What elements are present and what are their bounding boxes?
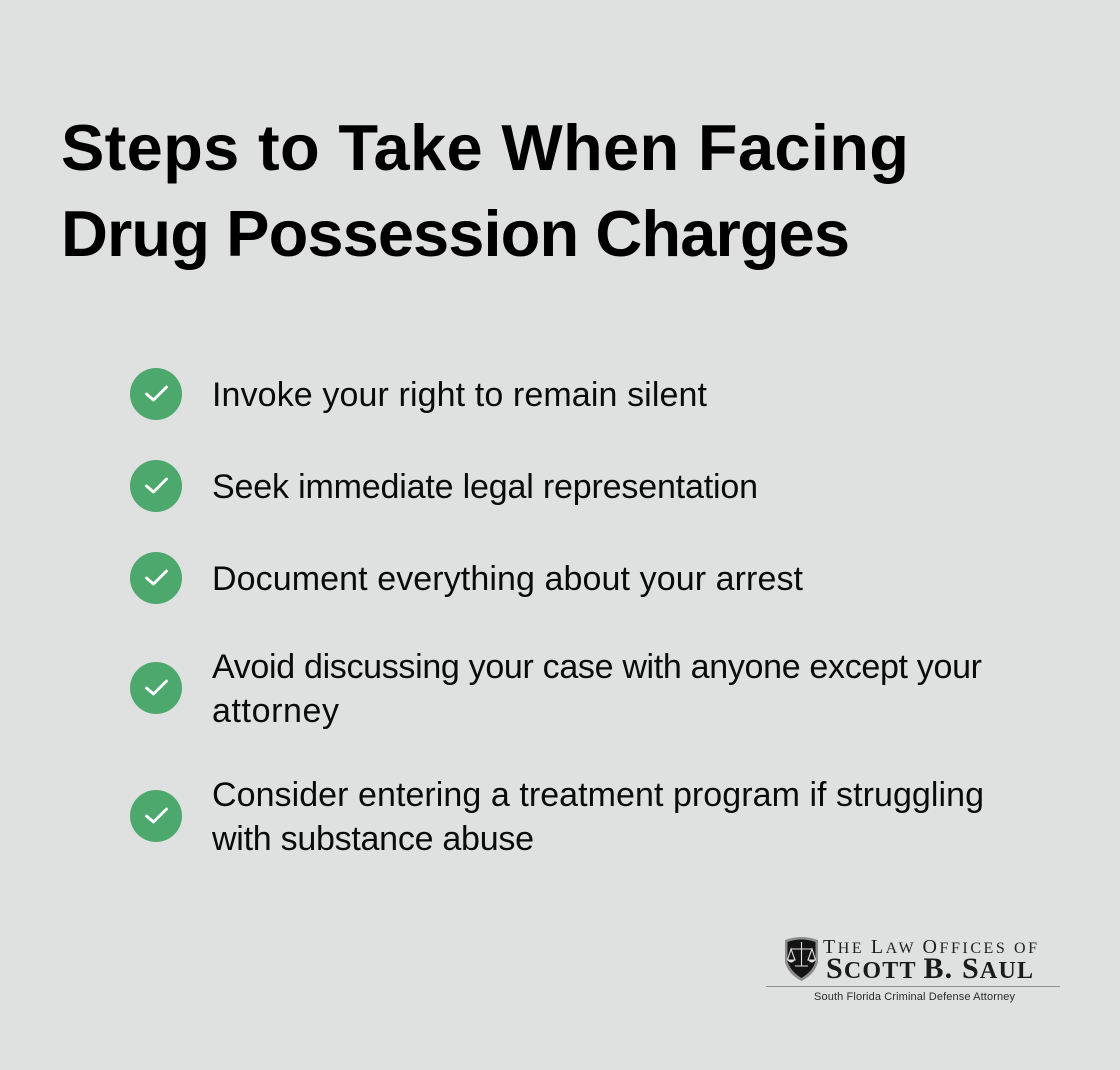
item 1: invoke right to remain silent: Invoke your right to remain silent (212, 376, 708, 414)
item 3: document arrest: Document everything about your arrest (212, 560, 804, 598)
item 5: consider treatment program: Consider entering a treatment program if struggling (212, 776, 984, 814)
item 2: seek legal representation (130, 460, 758, 512)
logo: law offices of Scott B. Saul (766, 936, 1060, 1003)
item 5: consider treatment program (130, 776, 984, 858)
logo divider (766, 986, 1060, 987)
item 4: avoid discussing case: Avoid discussing your case with anyone except your (212, 648, 982, 686)
item 3: document arrest (130, 552, 804, 604)
item 2: seek legal representation: Seek immediate legal representation (212, 468, 758, 506)
checklist (130, 368, 984, 858)
item 4: avoid discussing case: attorney (212, 692, 339, 730)
item 4: avoid discussing case (130, 648, 982, 730)
logo tagline: South Florida Criminal Defense Attorney (814, 991, 1016, 1003)
title: Steps to Take When Facing (61, 111, 909, 184)
icon: shield with scales (785, 937, 818, 981)
title (61, 111, 909, 270)
item 5: consider treatment program: with substance abuse (211, 820, 534, 858)
title: Drug Possession Charges (61, 197, 850, 270)
item 1: invoke right to remain silent (130, 368, 708, 420)
logo: law offices of Scott B. Saul: SCOTT B. SAUL (826, 952, 1033, 985)
logo wordmark: THE LAW OFFICES OF (823, 936, 1037, 958)
